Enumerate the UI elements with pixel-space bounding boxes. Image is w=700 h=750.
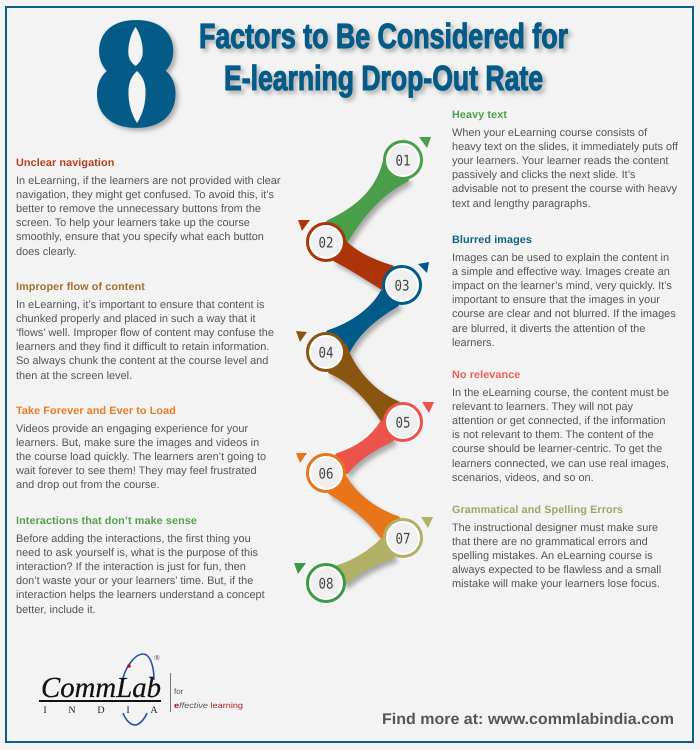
panel: improper flow of content	[16, 281, 274, 382]
text block: the course load quickly. The learners aren’t going to	[16, 451, 266, 463]
text block: always expected to be flawless and a small	[452, 564, 661, 576]
logo: CommLab India: A	[150, 705, 158, 716]
text block: scenarios, videos, and so on.	[452, 472, 594, 484]
ribbons	[328, 160, 407, 583]
node 07: 07	[396, 532, 410, 548]
logo: CommLab India: for	[174, 687, 184, 696]
node 06	[296, 453, 344, 492]
heading: Blurred images	[452, 234, 532, 246]
text block: your learners. Your learner reads the content	[452, 155, 668, 167]
text block: interaction? If the interaction is just for fun, then	[16, 561, 246, 573]
text block: wait forever to see them! They may feel frustrated	[16, 465, 257, 477]
text block: navigation, they might get confused. To avoid this, it’s	[16, 189, 274, 201]
node 01	[384, 137, 431, 178]
node 07	[384, 517, 433, 556]
text block: In eLearning, if the learners are not provided with clear	[16, 174, 280, 186]
text block: passively and clicks the next slide. It’s	[452, 169, 635, 181]
text block	[16, 422, 266, 491]
text block: learners.	[452, 337, 495, 349]
text block: impact on the learner’s mind, very quickly. It’s	[452, 280, 672, 292]
text block: attention or get connected, if the information	[452, 415, 665, 427]
logo: CommLab India: I	[43, 705, 47, 716]
panel: heavy text	[452, 109, 678, 210]
logo: CommLab India: D	[97, 705, 105, 716]
text block	[452, 252, 676, 349]
text block	[16, 174, 280, 258]
text block	[452, 126, 678, 210]
node 05: 05	[396, 416, 410, 432]
text block: learners and they find it difficult to retain information.	[16, 341, 269, 353]
panel: interactions	[16, 515, 265, 616]
heading: Improper flow of content	[16, 281, 145, 293]
text block	[452, 386, 669, 484]
website link: Find more at: www.commlabindia.com	[382, 711, 674, 728]
text block: then at the screen level.	[16, 370, 132, 382]
text block: important to ensure that the images in your	[452, 294, 660, 306]
text block: text and lengthy paragraphs.	[452, 198, 591, 210]
heading: Grammatical and Spelling Errors	[452, 504, 623, 516]
heading: Take Forever and Ever to Load	[16, 405, 176, 417]
logo: CommLab India	[39, 654, 243, 725]
title graphic: big 8 and heading	[96, 2, 573, 140]
text block: course should be learner-centric. To get the	[452, 443, 662, 455]
text block: spelling mistakes. An eLearning course is	[452, 550, 653, 562]
text block: better to remove the unnecessary buttons from the	[16, 203, 261, 215]
node 03: 03	[394, 278, 410, 294]
text block	[16, 532, 265, 616]
text block: smoothly, ensure that you specify what each button	[16, 231, 264, 243]
text block: In the eLearning course, the content must be	[452, 386, 669, 398]
panel: grammatical and spelling errors	[452, 504, 661, 590]
text block: ‘flows’ well. Improper flow of content may confuse the	[16, 327, 274, 339]
text block: When your eLearning course consists of	[452, 126, 647, 138]
heading: No relevance	[452, 369, 520, 381]
text block: heavy text on the slides, it immediately puts off	[452, 141, 678, 153]
panel: blurred images	[452, 234, 676, 349]
node 05	[384, 402, 434, 440]
title line 2: E-learning Drop-Out Rate	[224, 59, 543, 98]
node 01: 01	[396, 154, 410, 170]
panel: take forever to load	[16, 405, 266, 491]
logo: CommLab India: effective learning	[174, 701, 243, 710]
text block: Videos provide an engaging experience for your	[16, 422, 248, 434]
text block: learners connected, we can use real images,	[452, 458, 669, 470]
text block	[16, 298, 274, 382]
node 04	[296, 331, 344, 370]
heading: Interactions that don’t make sense	[16, 515, 197, 527]
node 08	[294, 563, 344, 602]
text block	[452, 522, 661, 590]
text block: In eLearning, it’s important to ensure that content is	[16, 298, 264, 310]
text block: chunked properly and placed in such a way that it	[16, 313, 256, 325]
panel: no relevance	[452, 369, 669, 484]
panel: unclear navigation	[16, 157, 280, 258]
text block: relevant to learners. They will not pay	[452, 401, 633, 413]
logo: CommLab India: N	[68, 705, 76, 716]
node 08: 08	[318, 576, 334, 592]
text block: need to ask yourself is, what is the purpose of this	[16, 547, 258, 559]
logo: CommLab India: CommLab	[41, 672, 161, 704]
node 03	[384, 262, 429, 304]
text block: screen. To help your learners take up the course	[16, 217, 250, 229]
text block: and drop out from the course.	[16, 479, 160, 491]
logo: CommLab India: ®	[154, 655, 160, 662]
text block: mistake will make your learners lose focus.	[452, 578, 660, 590]
text block: better, include it.	[16, 604, 96, 616]
node 02	[298, 220, 344, 260]
node 04: 04	[318, 346, 334, 362]
text block: course are clear and not blurred. If the images	[452, 308, 676, 320]
node 02: 02	[318, 236, 334, 252]
text block: The instructional designer must make sure	[452, 522, 658, 534]
text block: So always chunk the content at the course level and	[16, 355, 268, 367]
text block: advisable not to present the course with heavy	[452, 183, 677, 195]
text block: a simple and effective way. Images create an	[452, 266, 670, 278]
heading: Unclear navigation	[16, 157, 114, 169]
text block: don’t waste your or your learners’ time. But, if the	[16, 575, 253, 587]
text block: Images can be used to explain the content in	[452, 252, 669, 264]
text block: that there are no grammatical errors and	[452, 536, 648, 548]
heading: Heavy text	[452, 109, 507, 121]
title line 1: Factors to Be Considered for	[199, 17, 568, 56]
text block: learners. But, make sure the images and videos in	[16, 437, 259, 449]
node 06: 06	[318, 466, 334, 482]
text block: are blurred, it diverts the attention of the	[452, 323, 645, 335]
text block: interaction helps the learners understand a concept	[16, 589, 265, 601]
text block: is not relevant to them. The content of the	[452, 429, 654, 441]
logo: CommLab India: I	[126, 705, 130, 716]
text block: Before adding the interactions, the first thing you	[16, 532, 251, 544]
text block: does clearly.	[16, 246, 77, 258]
